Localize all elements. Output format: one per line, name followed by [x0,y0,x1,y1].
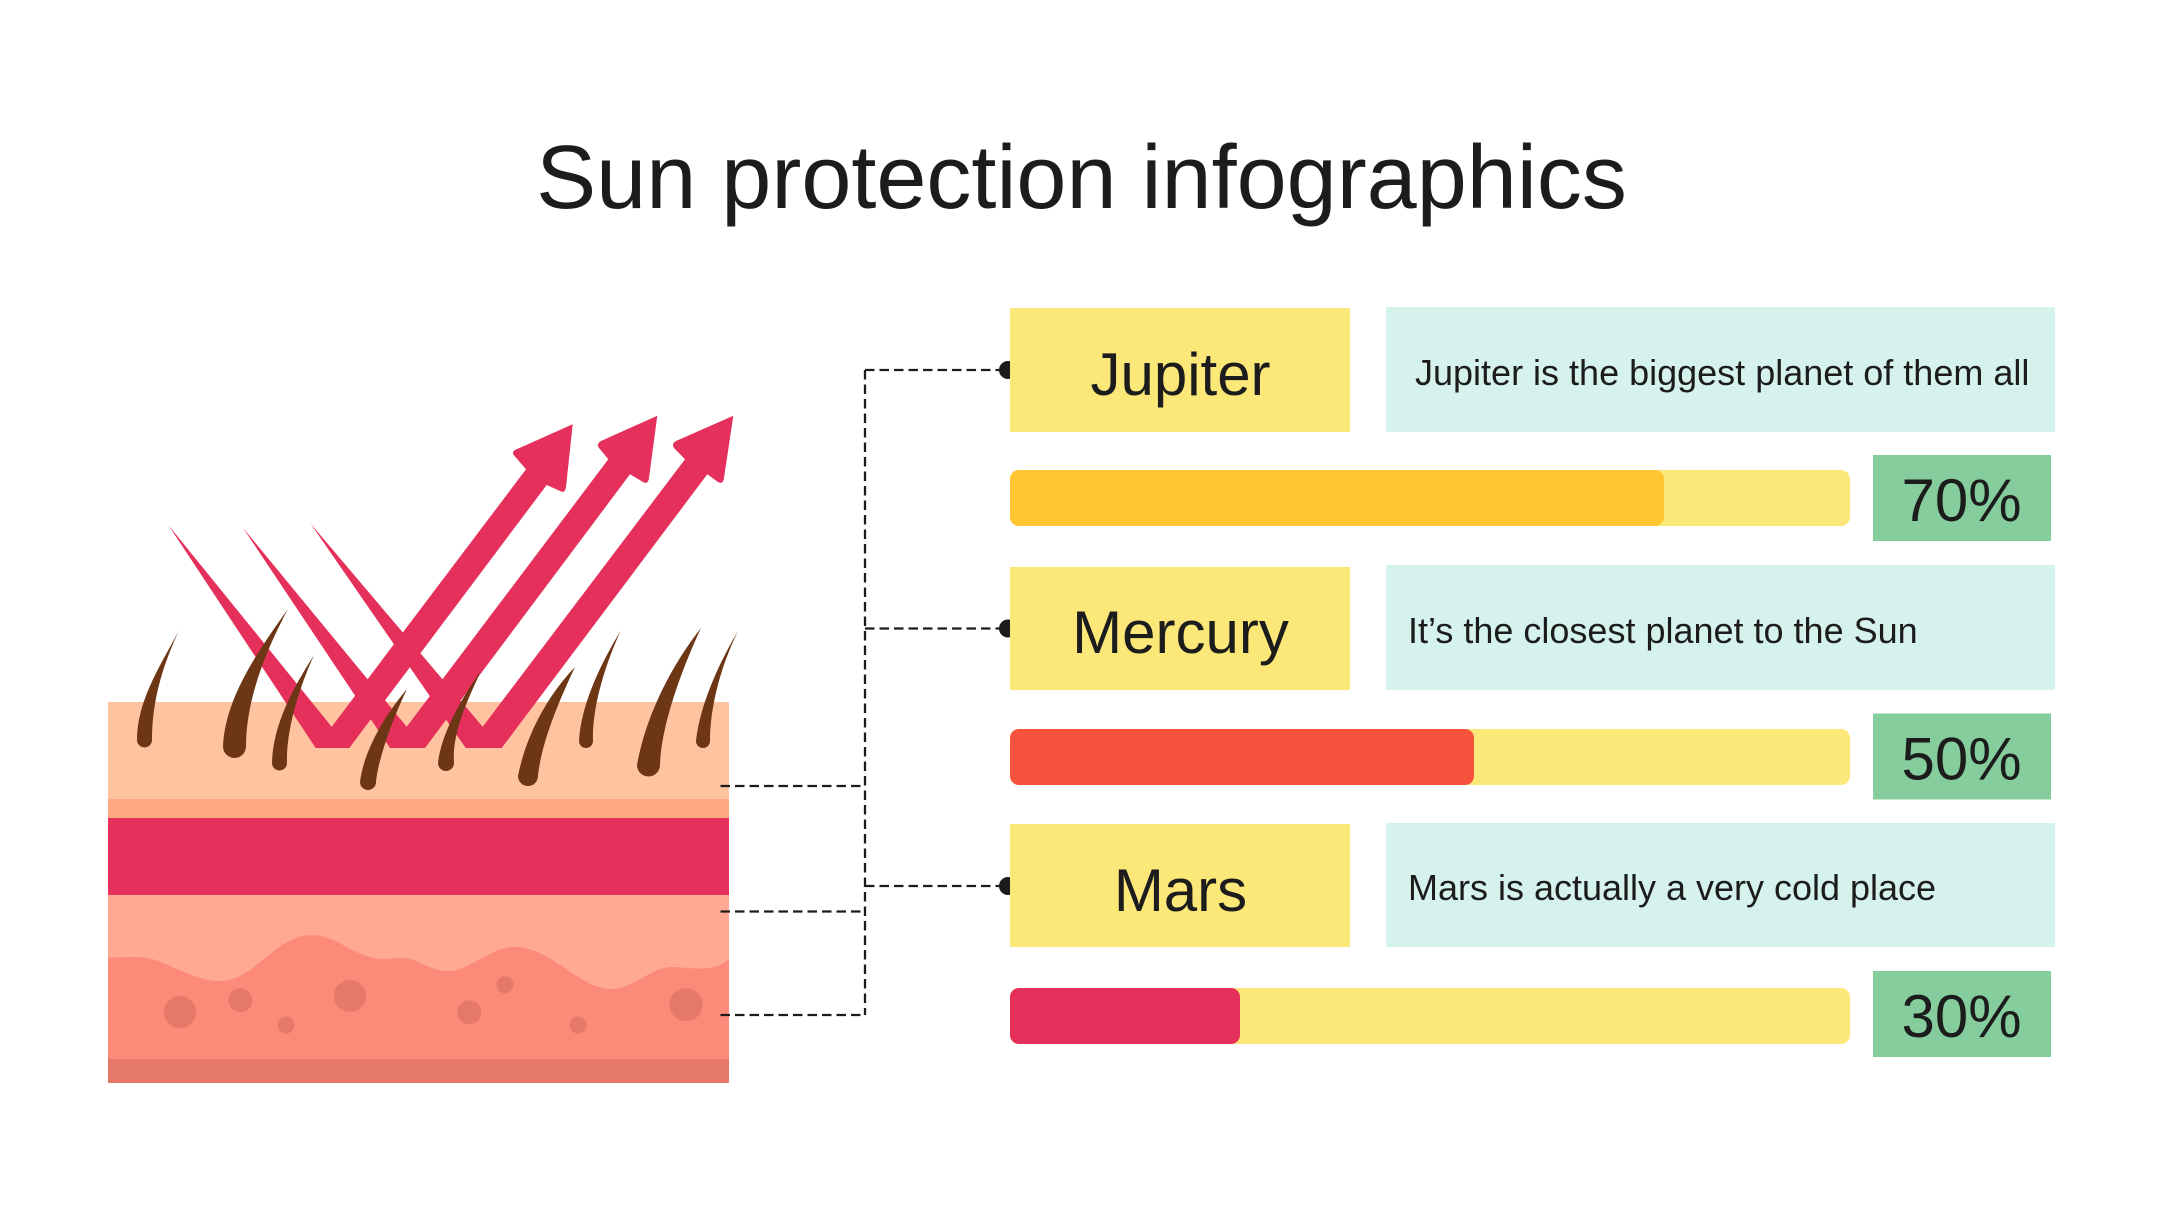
label box: Mercury [1010,567,1350,690]
percent: 70%: 70% [1901,467,2022,534]
percent: 50% [1873,714,2051,800]
progress bar: Mars 30% [1010,988,1850,1044]
label box: Mars [1010,824,1350,947]
progress bar: Jupiter 70% [1010,470,1850,526]
label box: Mercury: Mercury [1072,599,1289,666]
hairs [137,609,738,790]
tissue cells [164,976,702,1034]
description: Mars [1386,823,2055,947]
connector dots [999,361,1017,895]
skin layer: surface [108,702,729,799]
title: Sun protection infographics [536,128,1627,228]
percent: 70% [1873,455,2051,541]
progress bar: Mercury 50% [1010,729,1850,785]
description: Mercury [1386,565,2055,690]
label box: Jupiter [1010,308,1350,432]
percent: 30% [1873,971,2051,1057]
row: Mercury [1010,565,2055,800]
percent: 30%: 30% [1901,983,2022,1050]
reflected sun ray arrows [168,416,733,748]
row: Mars [1010,823,2055,1057]
percent: 50%: 50% [1901,726,2022,792]
skin layer: wavy salmon tissue [108,935,729,1060]
skin cross-section illustration [108,416,738,1083]
skin layer: red band [108,818,729,895]
description: Jupiter [1386,307,2055,432]
skin layer: light salmon [108,895,729,995]
skin layer: bottom band [108,1059,729,1083]
dashed connector lines [720,370,1004,1015]
skin layer: orange band [108,799,729,818]
description: Jupiter: Jupiter is the biggest planet of them all [1415,352,2029,393]
description: Mercury: It’s the closest planet to the Sun [1408,610,1918,651]
label box: Jupiter: Jupiter [1090,341,1271,408]
description: Mars: Mars is actually a very cold place [1408,867,1936,908]
row: Jupiter [1010,307,2055,541]
label box: Mars: Mars [1114,857,1247,924]
